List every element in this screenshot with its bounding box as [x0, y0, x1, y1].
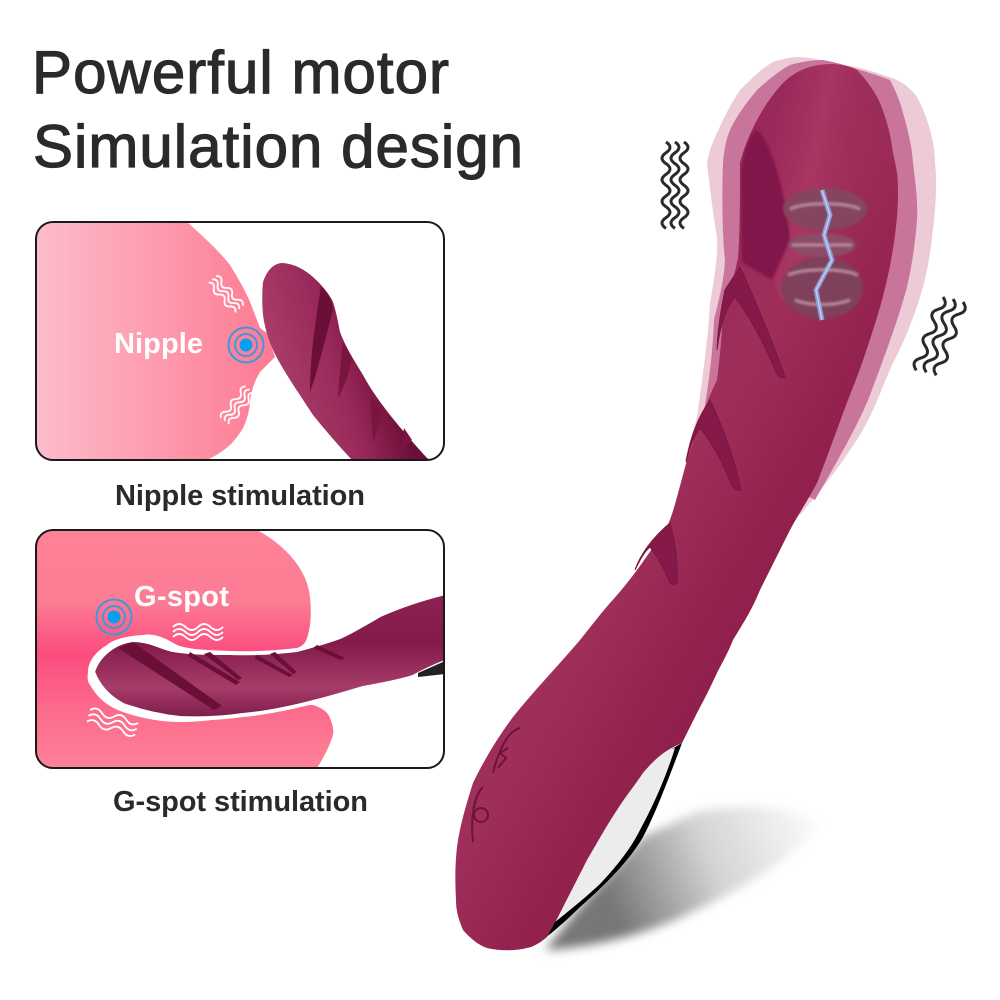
- product: motor cutaway: [781, 188, 867, 320]
- icon: vibration waves: [208, 275, 252, 424]
- caption: nipple stimulation: Nipple stimulation: [115, 480, 365, 512]
- icon: target: [228, 328, 264, 362]
- product: control icons: [472, 728, 520, 842]
- product: silver base: [545, 743, 682, 938]
- breast shape: [36, 222, 275, 460]
- title: Simulation design: [33, 113, 523, 180]
- product: head highlight: [740, 64, 898, 330]
- icon: vibration right: [912, 295, 967, 377]
- silver tip: [418, 662, 443, 677]
- icon: vibration left: [662, 142, 688, 228]
- label: Nipple: [114, 328, 203, 360]
- icon: target: [96, 600, 132, 634]
- caption: g-spot stimulation: G-spot stimulation: [113, 786, 368, 818]
- title: [32, 39, 523, 180]
- tissue shape: [36, 530, 333, 768]
- product: main body: [455, 64, 898, 950]
- product: motion ghost layers: [685, 57, 936, 515]
- panel: nipple stimulation: [36, 222, 444, 460]
- cast shadow: [545, 807, 822, 950]
- icon: vibration waves: [86, 624, 223, 737]
- device: [93, 593, 445, 718]
- product: ridges: [635, 267, 785, 584]
- device tip: [262, 263, 430, 460]
- label: G-spot: [134, 581, 229, 613]
- product: dark head reflection: [742, 130, 790, 280]
- panel: g-spot stimulation: [36, 530, 445, 768]
- title: Powerful motor: [32, 39, 449, 106]
